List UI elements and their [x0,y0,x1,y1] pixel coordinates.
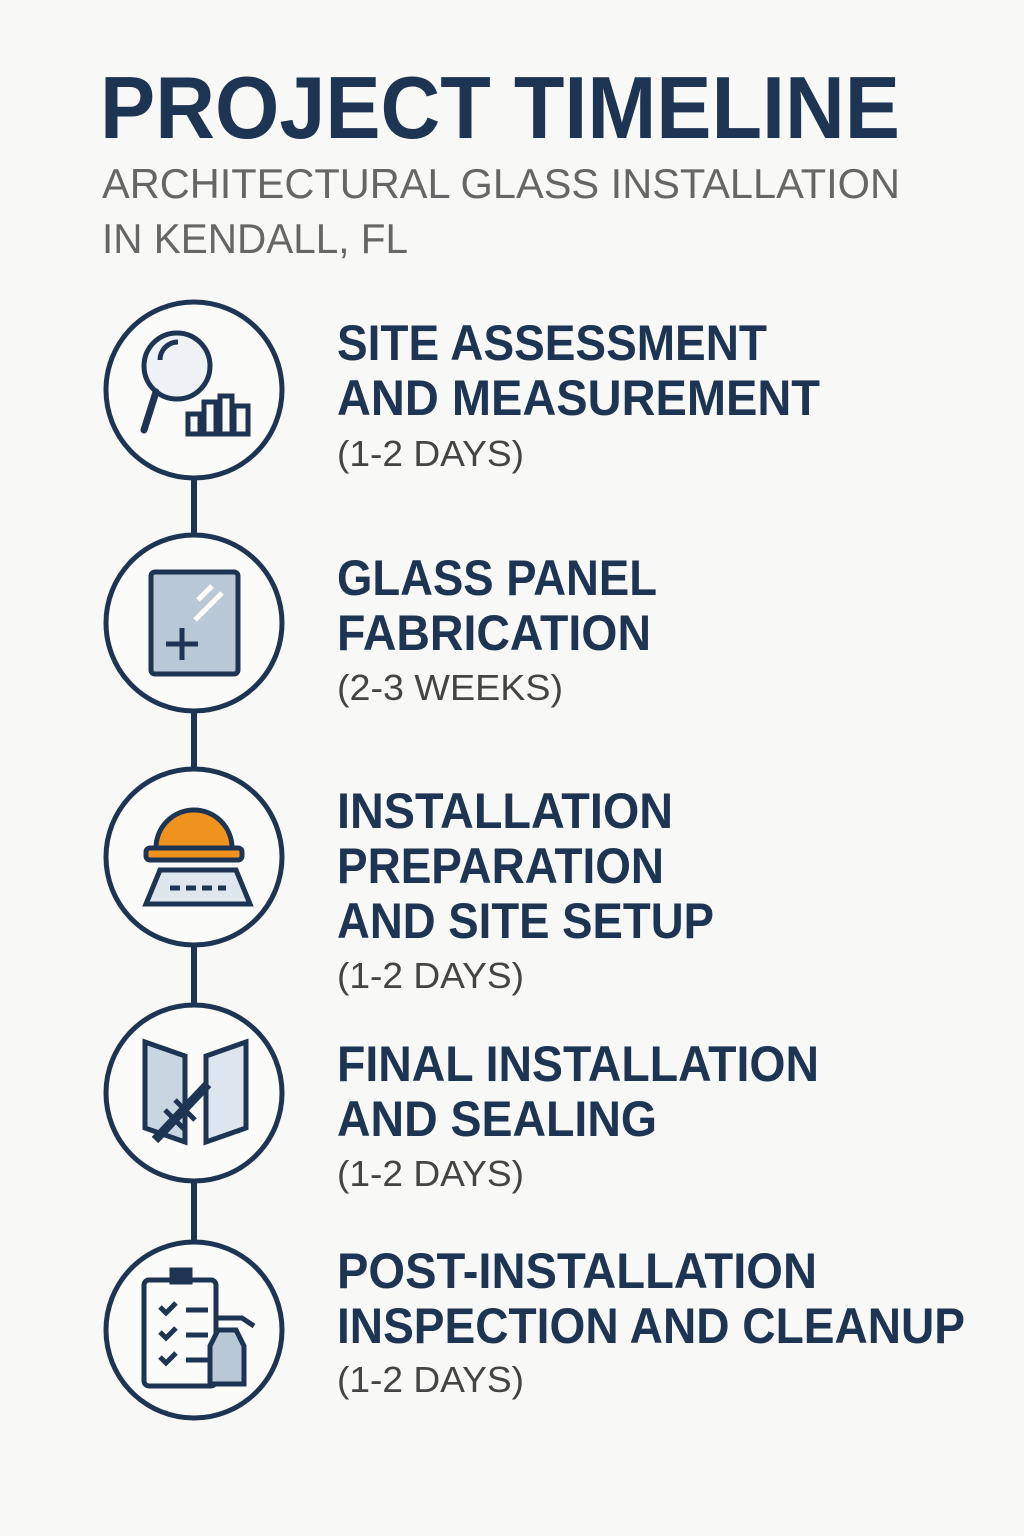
title: PROJECT TIMELINE [100,58,900,157]
subtitle [102,160,900,262]
text: step 1: AND MEASUREMENT [337,370,820,426]
text: step 5: (1-2 DAYS) [337,1359,524,1400]
text: step 4: FINAL INSTALLATION [337,1036,819,1092]
step 2: fabrication [106,535,657,711]
text: step 3: INSTALLATION [337,783,673,839]
step 5: inspection [106,1242,965,1418]
text: step 1: SITE ASSESSMENT [337,315,767,371]
text: step 4: AND SEALING [337,1091,657,1147]
icon: panels and caulk gun [106,1005,282,1181]
text: step 3: (1-2 DAYS) [337,955,524,996]
text: step 2: GLASS PANEL [337,550,657,606]
text: step 3: AND SITE SETUP [337,893,714,949]
text: step 1 [337,315,820,474]
text: step 2: FABRICATION [337,605,651,661]
step 3: preparation [106,769,714,996]
step 4: final installation [106,1005,819,1194]
text: step 5: POST-INSTALLATION [337,1243,817,1299]
text: step 2: (2-3 WEEKS) [337,667,563,708]
text: step 3 [337,783,714,996]
icon: glass panel [106,535,282,711]
text: step 4: (1-2 DAYS) [337,1153,524,1194]
icon: magnifier and chart [106,302,282,478]
subtitle: IN KENDALL, FL [102,215,408,262]
icon: hard hat [106,769,282,945]
text: step 4 [337,1036,819,1194]
text: step 1: (1-2 DAYS) [337,433,524,474]
step 1: site assessment [106,302,820,478]
timeline connector [191,478,197,1242]
text: step 5: INSPECTION AND CLEANUP [337,1298,965,1354]
text: step 5 [337,1243,965,1400]
subtitle: ARCHITECTURAL GLASS INSTALLATION [102,160,900,207]
text: step 2 [337,550,657,708]
text: step 3: PREPARATION [337,838,664,894]
icon: clipboard and spray [106,1242,282,1418]
